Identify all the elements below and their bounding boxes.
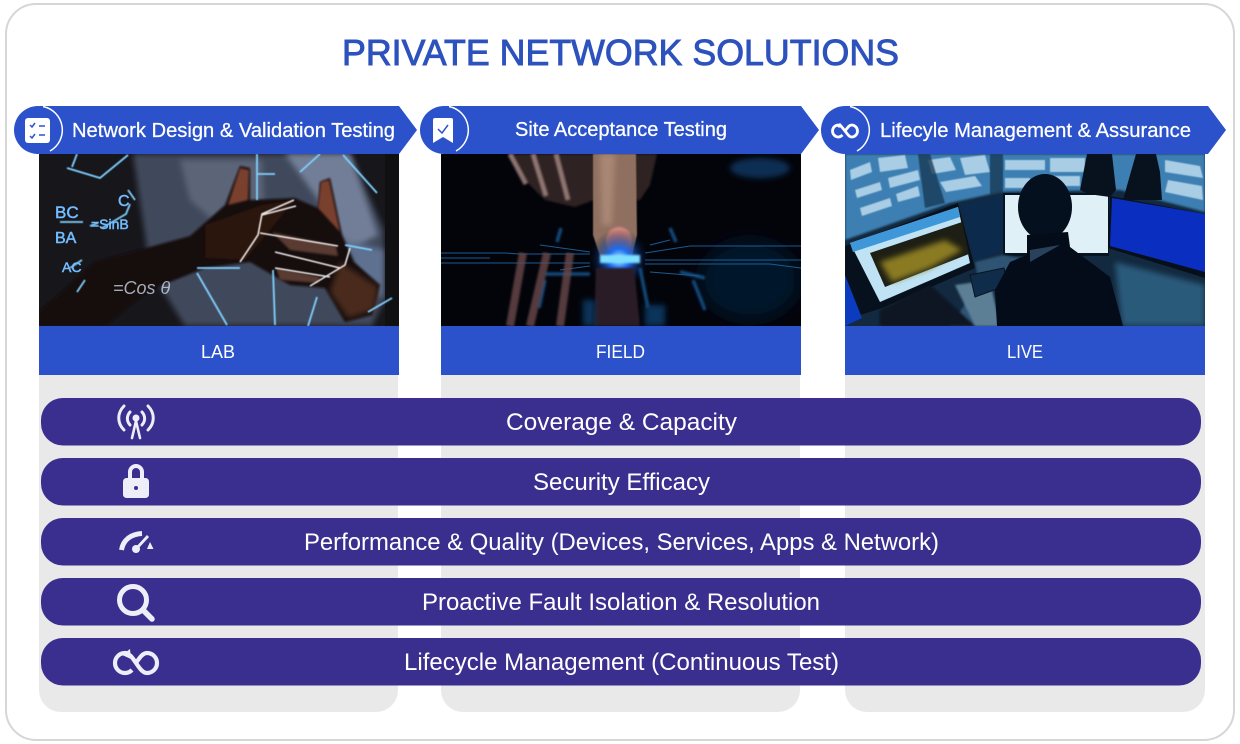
pill: performance and quality [41,518,1201,566]
banner: lifecycle management and assurance: Lifecyle Management & Assurance [880,120,1191,142]
photo: hands and equations: =Cos θ [113,278,171,298]
photo: hands and equations [39,154,399,326]
photo: monitoring control room [845,154,1205,326]
band: LAB [39,326,399,375]
title: PRIVATE NETWORK SOLUTIONS [342,32,899,73]
icon: padlock [123,466,149,498]
column background: lab [39,375,398,712]
icon: continuous loop [115,649,157,673]
icon: speedometer [122,534,154,553]
band: LIVE [845,326,1205,375]
icon: bookmark check [433,118,453,143]
band: LAB: LAB [201,342,235,362]
column background: field [441,375,800,712]
pill: lifecycle management [41,638,1201,686]
pill: coverage and capacity: Coverage & Capacity [506,409,737,436]
band: LIVE: LIVE [1007,342,1043,362]
pill: lifecycle management: Lifecycle Management (Continuous Test) [404,649,839,676]
column background: live [845,375,1205,712]
pill: coverage and capacity [41,398,1201,446]
pill: security efficacy: Security Efficacy [533,469,710,496]
banner: site acceptance testing [420,106,819,154]
banner: network design and validation testing [14,106,417,154]
pill: security efficacy [41,458,1201,506]
icon: antenna [119,406,153,438]
icon: checklist [25,118,50,143]
icon: magnifier [120,586,152,619]
pill: proactive fault isolation [41,578,1201,626]
photo: finger touching circuit [441,154,801,326]
photo: hands and equations: =SinB [91,216,129,232]
panel: field column [441,154,801,712]
icon: infinity loop [832,124,858,137]
panel: live column [845,154,1205,712]
panel: lab column [39,154,399,712]
photo: hands and equations: BC [55,203,79,222]
band: FIELD: FIELD [596,342,645,362]
photo: hands and equations: BA [55,230,77,247]
banner: lifecycle management and assurance [821,106,1226,154]
banner: network design and validation testing: Network Design & Validation Testing [72,120,395,142]
banner: site acceptance testing: Site Acceptance Testing [515,119,727,141]
band: FIELD [441,326,801,375]
photo: hands and equations: C [118,193,130,210]
pill: proactive fault isolation: Proactive Fault Isolation & Resolution [422,589,820,616]
photo: hands and equations: AC [62,259,81,275]
pill: performance and quality: Performance & Quality (Devices, Services, Apps & Network) [304,529,939,556]
